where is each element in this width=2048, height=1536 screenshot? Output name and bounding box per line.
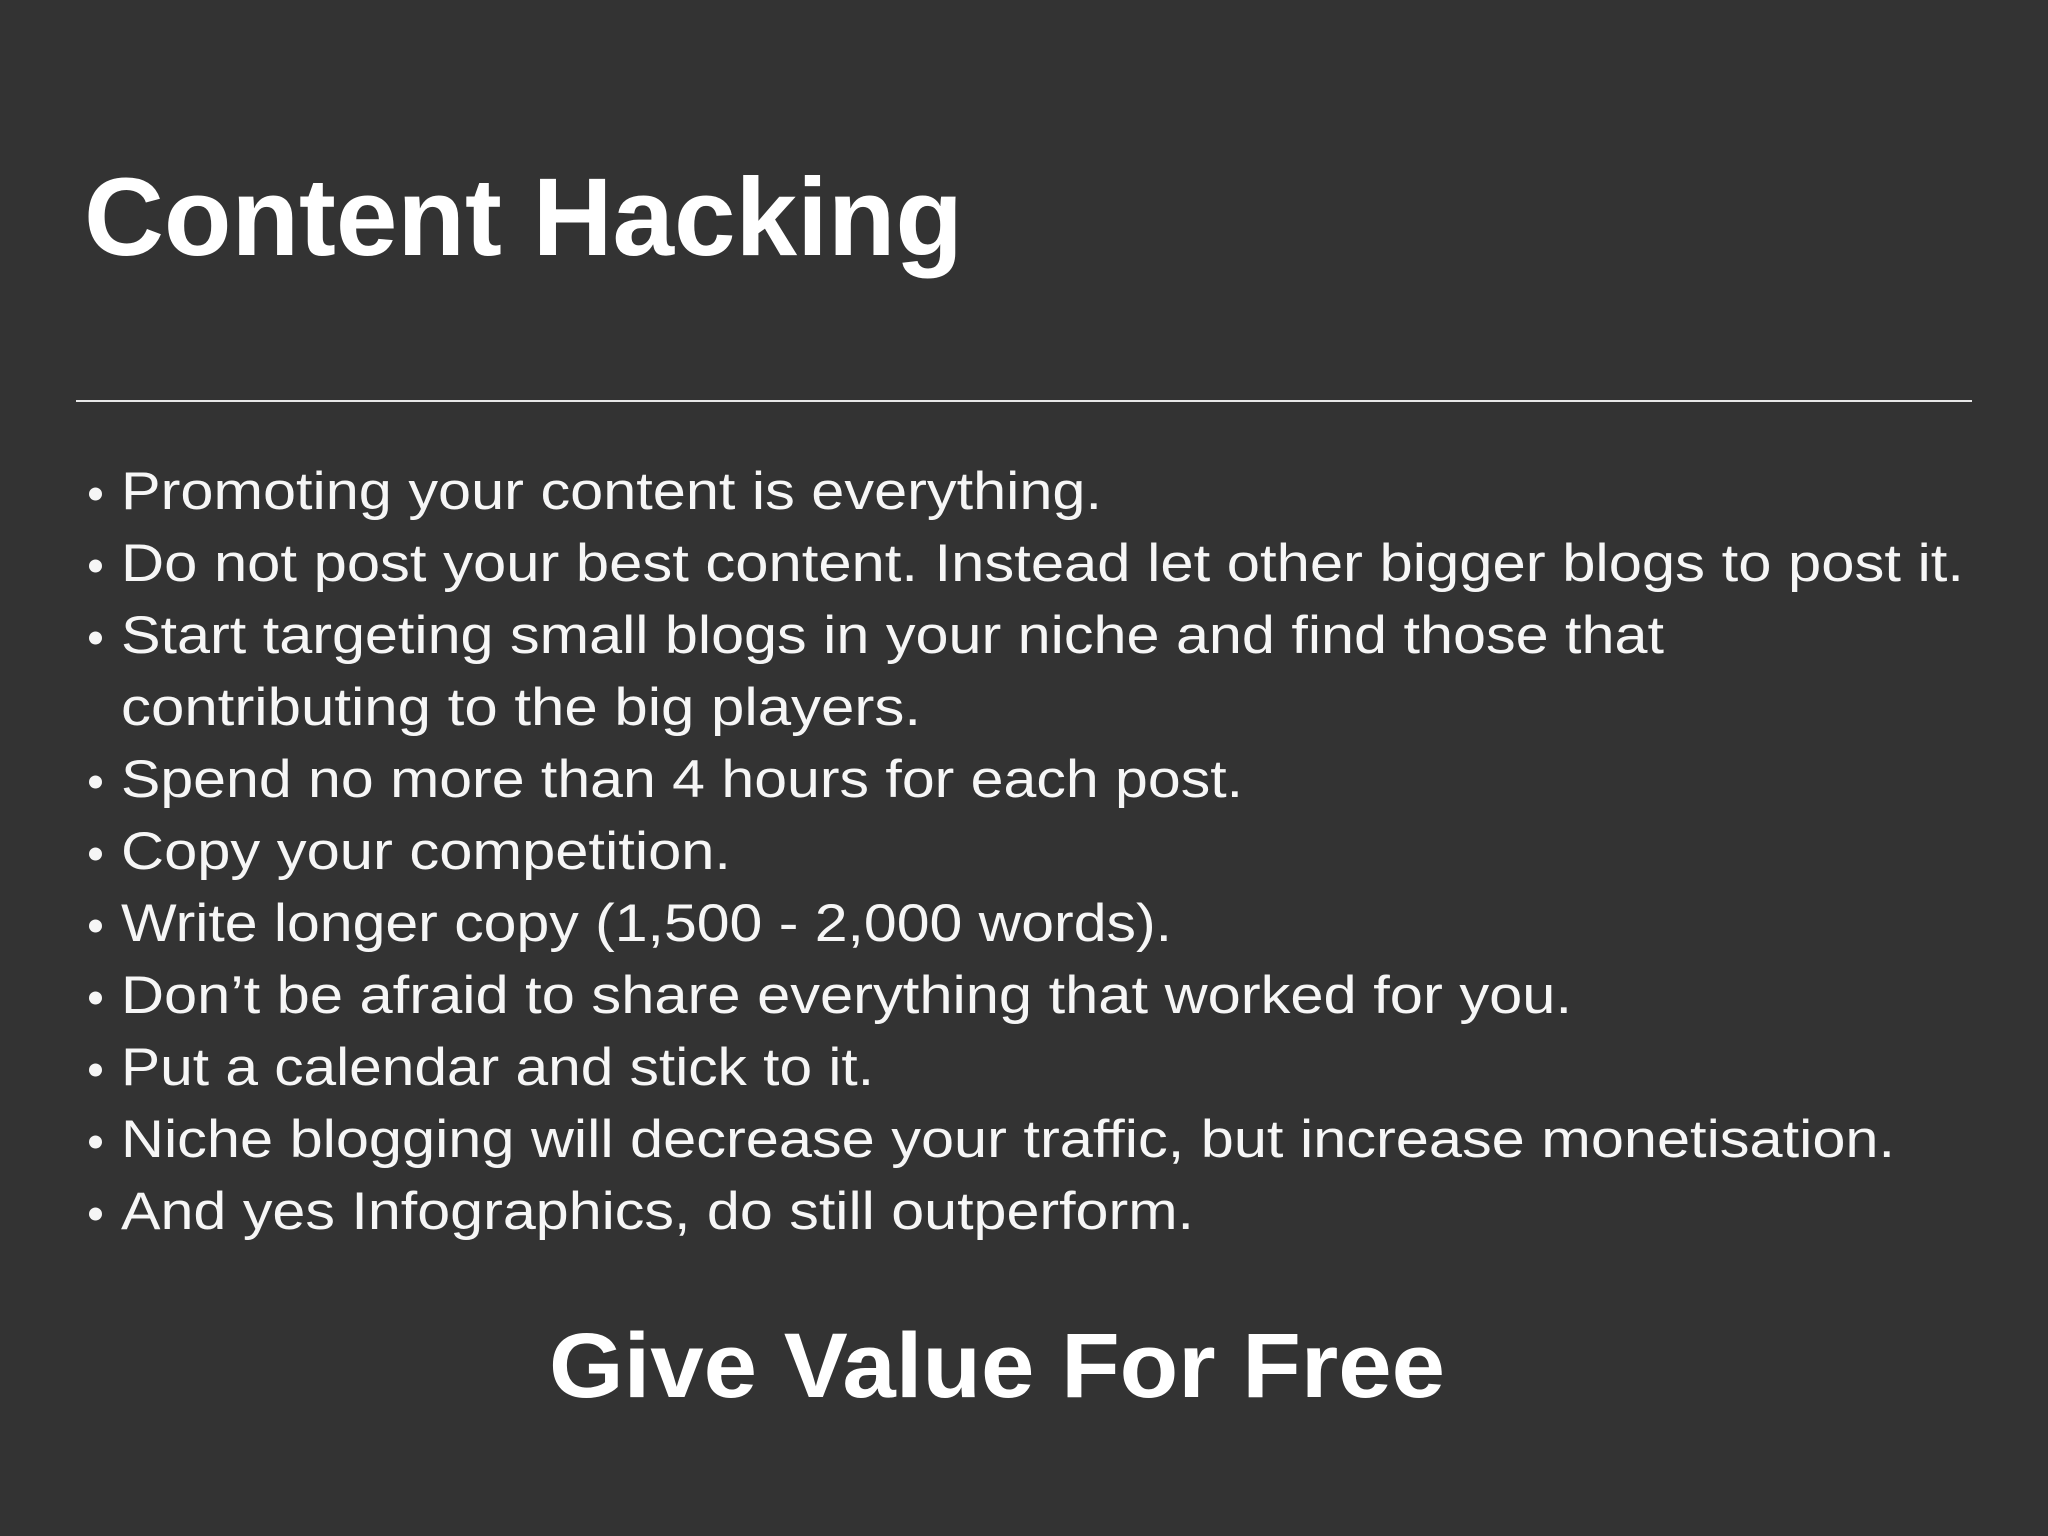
bullet 7: Don’t be afraid to share everything that worked for you. (121, 966, 1572, 1025)
bullet 3: contributing to the big players. (121, 678, 921, 737)
bullet 5: Copy your competition. (121, 822, 731, 881)
bullet 4: Spend no more than 4 hours for each post. (121, 750, 1243, 809)
bullet list (89, 462, 1964, 1241)
bullet 8: Put a calendar and stick to it. (121, 1038, 874, 1097)
bullet 1: Promoting your content is everything. (121, 462, 1102, 521)
bullet 6: Write longer copy (1,500 - 2,000 words). (121, 894, 1172, 953)
title: Content Hacking (84, 156, 963, 279)
bullet 3 (89, 606, 1664, 737)
bullet 10: And yes Infographics, do still outperform. (121, 1182, 1194, 1241)
bullet 2: Do not post your best content. Instead let other bigger blogs to post it. (121, 534, 1964, 593)
bullet 3: Start targeting small blogs in your niche and find those that (121, 606, 1664, 665)
bullet 9: Niche blogging will decrease your traffic, but increase monetisation. (121, 1110, 1895, 1169)
closing tagline: Give Value For Free (549, 1315, 1445, 1417)
